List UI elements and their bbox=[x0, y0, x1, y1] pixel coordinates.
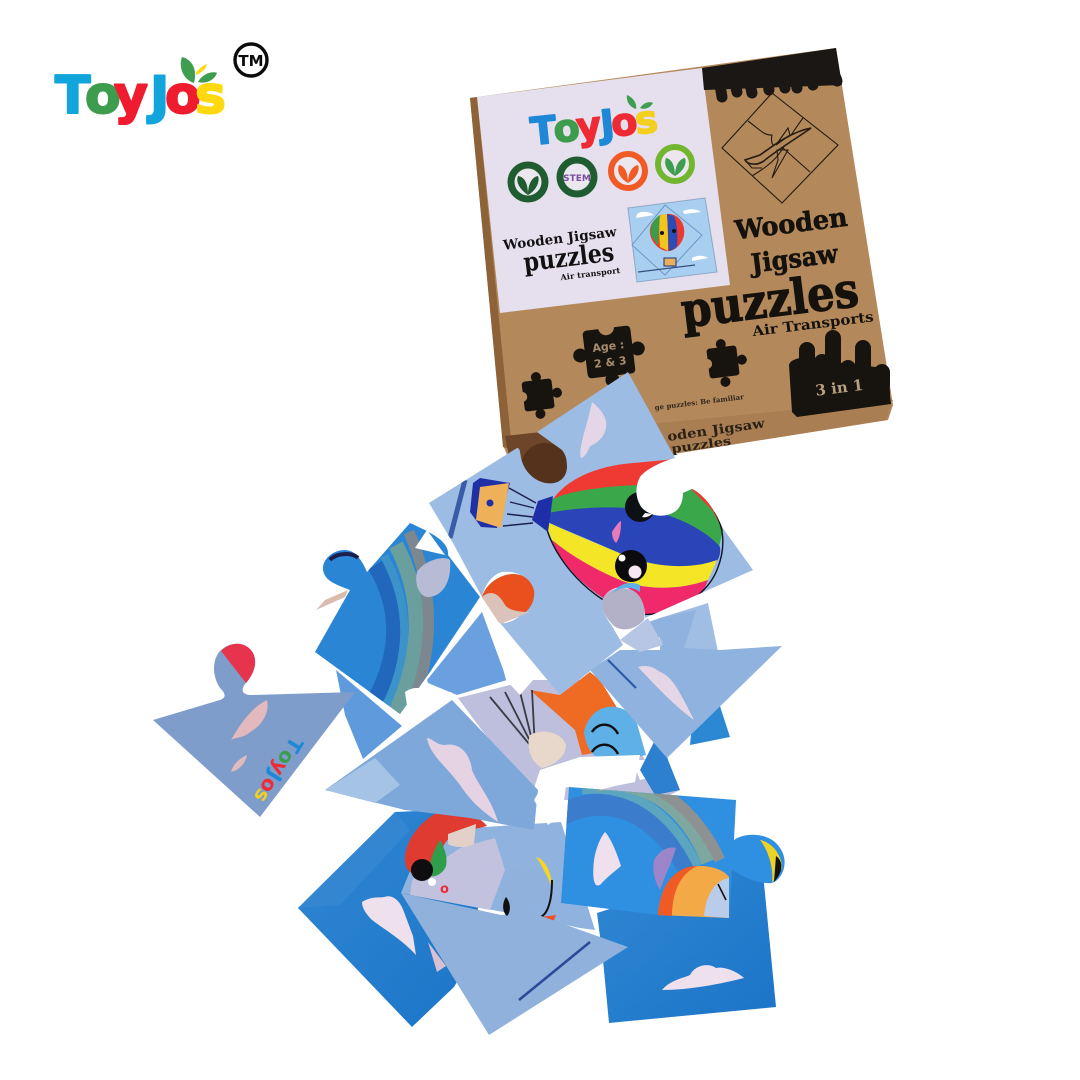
piece: blue triangle center bbox=[427, 612, 507, 695]
piece: lower left blue with cloud bbox=[298, 810, 490, 1027]
piece logo: s bbox=[249, 785, 276, 807]
box face bbox=[470, 48, 893, 462]
title word puzzles: puzzles bbox=[678, 262, 862, 339]
box bottom side bbox=[508, 400, 893, 462]
cloud bbox=[362, 896, 416, 955]
label puzzles word: puzzles bbox=[522, 238, 616, 278]
black drips bbox=[702, 48, 842, 97]
black puzzle icon right bbox=[699, 336, 750, 389]
piece logo: J bbox=[263, 765, 288, 786]
label heading line: Wooden Jigsaw bbox=[501, 224, 618, 254]
label logo bbox=[528, 95, 660, 154]
black puzzle icon left bbox=[514, 369, 565, 421]
dark box opening bbox=[505, 430, 575, 462]
badge text: 3 in 1 bbox=[814, 376, 864, 400]
logo wordmark: T bbox=[55, 66, 91, 126]
title word Jigsaw: Jigsaw bbox=[748, 239, 840, 280]
airplane line art puzzle bbox=[722, 93, 838, 203]
label subtitle: Air transport bbox=[559, 265, 621, 282]
piece: rainbow left bbox=[315, 523, 480, 722]
label title bbox=[501, 224, 622, 289]
white product label bbox=[477, 68, 730, 313]
cloud bbox=[427, 738, 498, 822]
piece: central lavender with ropes and balloon face bbox=[458, 672, 680, 825]
piece: medium blue behind left bbox=[336, 670, 402, 759]
label logo: y bbox=[574, 103, 604, 149]
logo wordmark: o bbox=[85, 66, 121, 126]
logo leaves bbox=[181, 57, 217, 83]
cardboard puzzle box bbox=[470, 48, 893, 462]
logo wordmark: s bbox=[195, 66, 226, 126]
logo wordmark: o bbox=[165, 66, 201, 126]
box left edge bbox=[470, 97, 512, 450]
trademark badge bbox=[235, 44, 267, 76]
piece logo: y bbox=[266, 757, 293, 780]
logo wordmark: J bbox=[147, 66, 169, 126]
dark hole behind top piece bbox=[521, 443, 569, 491]
piece logo: o bbox=[272, 745, 300, 770]
piece logo: o bbox=[255, 773, 283, 798]
notch hole orange bbox=[482, 574, 534, 624]
piece: left triangle with logo bbox=[153, 644, 355, 817]
piece: center lavender with balloon crown: o bbox=[440, 882, 449, 897]
piece: rainbow lower right bbox=[561, 779, 785, 918]
piece: middle light blue with cloud bbox=[325, 700, 538, 830]
certification badges bbox=[511, 147, 692, 199]
small box copy: ge puzzles: Be familiar bbox=[654, 392, 745, 412]
label logo: T bbox=[528, 107, 559, 154]
label logo: J bbox=[595, 101, 617, 147]
certification badges: STEM bbox=[563, 174, 591, 184]
cloud bbox=[580, 402, 606, 458]
age puzzle piece: 2 & 3 bbox=[593, 354, 627, 371]
piece logo: T bbox=[280, 733, 308, 757]
bottom side title bbox=[666, 416, 767, 456]
hot air balloon bbox=[450, 459, 723, 615]
label logo: o bbox=[609, 99, 639, 145]
piece: right light blue with cloud bbox=[590, 610, 782, 758]
piece: center lavender with balloon crown bbox=[401, 810, 595, 930]
piece: blue behind knob top right bbox=[660, 603, 718, 655]
scattered puzzle pieces bbox=[153, 372, 785, 1035]
cloud bbox=[231, 700, 268, 772]
brand logo bbox=[55, 44, 267, 126]
three in one black badge bbox=[789, 338, 891, 417]
bottom side title: oden Jigsaw bbox=[666, 416, 767, 445]
label logo: s bbox=[633, 97, 660, 143]
age text: Age : bbox=[592, 338, 625, 355]
white gaps between pieces bbox=[405, 623, 566, 825]
piece: triangle lower center bbox=[401, 866, 628, 1035]
cloud bbox=[662, 965, 744, 990]
cloud bbox=[593, 832, 621, 886]
title word Wooden: Wooden bbox=[732, 203, 849, 246]
main box title bbox=[671, 201, 875, 348]
cloud bbox=[638, 666, 694, 720]
age puzzle piece bbox=[569, 315, 649, 391]
piece: top light blue with hot air balloon bbox=[429, 372, 753, 695]
bottom side title: puzzles bbox=[670, 434, 732, 456]
trademark badge: TM bbox=[238, 52, 264, 70]
label mini puzzle picture bbox=[628, 198, 717, 282]
piece: bottom right blue with cloud bbox=[597, 870, 776, 1023]
notch grey knob bbox=[602, 588, 645, 629]
logo wordmark: y bbox=[114, 66, 148, 126]
piece: blue strip behind right bbox=[690, 690, 730, 745]
label logo: o bbox=[551, 105, 582, 152]
title subtitle: Air Transports bbox=[750, 309, 875, 340]
